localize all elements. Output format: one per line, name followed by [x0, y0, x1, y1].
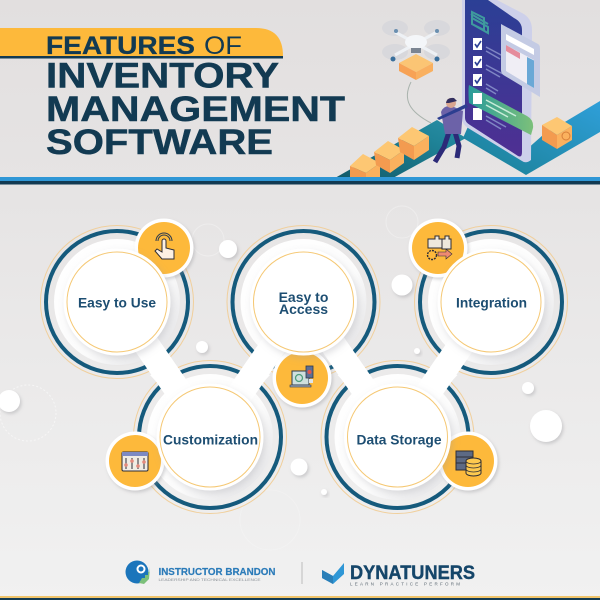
- box 4: [542, 117, 572, 149]
- icon: hand tap: [155, 233, 174, 259]
- phone: highlighted green bar: [468, 85, 533, 135]
- illustration: conveyor boxes: [350, 117, 572, 181]
- disc halos: [54, 239, 554, 500]
- ring: customization: [134, 360, 286, 514]
- logo: instructor brandon: INSTRUCTOR BRANDON: [158, 567, 276, 578]
- icon: sliders window: [122, 452, 148, 471]
- logo divider: [302, 562, 303, 584]
- logo: dynatuners: LEARN PRACTICE PERFORM: [350, 582, 460, 586]
- title: SOFTWARE: [46, 123, 273, 162]
- circle: integration: [438, 248, 544, 356]
- logo: instructor brandon: [126, 560, 276, 584]
- icon: dynatuners check: [322, 563, 344, 584]
- phone: table card: [501, 24, 540, 97]
- circle: integration: Integration: [456, 294, 527, 310]
- title: [46, 32, 345, 162]
- badge: data storage: [438, 432, 498, 490]
- white connectors: [117, 302, 491, 437]
- circle: data storage: [344, 384, 451, 490]
- circle: easy to access: Access: [279, 301, 328, 317]
- footer rule: [0, 596, 600, 600]
- box 1: [350, 154, 380, 181]
- badge: integration: [408, 218, 468, 278]
- illustration: phone: [462, 0, 540, 162]
- ring: easy to access: [227, 226, 380, 378]
- ring: easy to use: [40, 226, 194, 378]
- phone: box logo: [471, 12, 488, 33]
- circle: customization: [156, 384, 264, 490]
- box 3: [398, 127, 429, 160]
- logo: dynatuners: DYNATUNERS: [350, 563, 475, 584]
- badge: customization: [106, 432, 164, 490]
- title: INVENTORY: [46, 56, 279, 96]
- circle: easy to access: [250, 248, 357, 356]
- illustration: delivery arrow: [407, 82, 431, 123]
- circle: easy to use: [64, 248, 170, 356]
- illustration: drone package: [399, 54, 433, 80]
- title: FEATURES: [46, 32, 195, 60]
- badge: easy to use: [134, 218, 194, 278]
- badge: easy to access: [272, 348, 332, 408]
- header rule: [0, 177, 600, 184]
- title: OF: [204, 32, 242, 60]
- phone: checklist: [473, 38, 506, 129]
- icon: server and database: [456, 451, 481, 476]
- decorative faint circles and bubbles: [0, 206, 562, 550]
- circle: easy to access: Easy to: [279, 289, 328, 305]
- rings: [40, 226, 568, 514]
- circle: customization: Customization: [163, 431, 258, 447]
- icon: instructor brandon mark: [126, 560, 150, 584]
- logo: instructor brandon: LEADERSHIP AND TECHNICAL EXCELLENCE: [158, 577, 261, 582]
- circle: easy to use: Easy to Use: [78, 294, 156, 310]
- illustration: drone: [382, 20, 450, 62]
- title: MANAGEMENT: [46, 90, 345, 129]
- circle: data storage: Data Storage: [356, 431, 442, 447]
- illustration: worker with pencil: [435, 98, 468, 162]
- ring: data storage: [321, 360, 474, 514]
- icon: laptop dashboard: [290, 366, 313, 387]
- ring: integration: [414, 226, 568, 378]
- header banner: [0, 28, 283, 58]
- box 2: [374, 141, 404, 173]
- illustration: conveyor belt: [335, 101, 600, 178]
- icon: puzzle gear arrow: [428, 236, 452, 260]
